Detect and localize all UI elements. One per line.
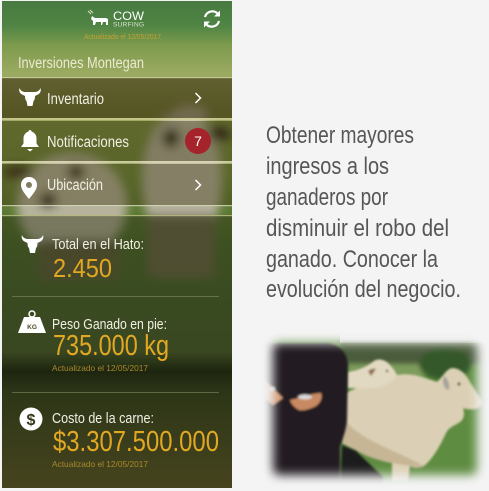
icon: weight KG: [18, 311, 46, 333]
menu item: Notificaciones: [21, 128, 211, 154]
logo: Cow Surfing: COW: [113, 9, 145, 23]
text block: objective statement: ganaderos por: [266, 184, 388, 211]
stat: costo de la carne: Actualizado el 12/05/2017: [52, 459, 148, 469]
icon: dollar coin: $: [27, 412, 36, 429]
blurred photo background of cattle: [2, 1, 232, 488]
divider: [12, 392, 219, 393]
menu item: Inventario: Inventario: [47, 91, 104, 108]
icon: bull head: [22, 235, 43, 253]
icon: bell: [21, 130, 39, 152]
icon: location pin: [21, 177, 37, 199]
menu item: Inventario: [19, 88, 200, 108]
stat: peso ganado en pie: 735.000 kg: [53, 330, 169, 362]
icon: weight KG: KG: [27, 324, 37, 331]
menu item: Ubicación: Ubicación: [47, 177, 103, 194]
menu item: Notificaciones: Notificaciones: [47, 134, 129, 151]
stat: peso ganado en pie: Peso Ganado en pie:: [52, 317, 167, 333]
heading: company name: Inversiones Montegan: [18, 55, 144, 72]
stat: costo de la carne: [20, 408, 219, 469]
menu row overlays: [2, 77, 232, 488]
update date: Actualizado el 12/05/2017: [84, 32, 161, 41]
menu item: Ubicación: [21, 177, 200, 199]
stat: total en el hato: Total en el Hato:: [52, 237, 144, 253]
cattle: [342, 360, 482, 481]
stat: total en el hato: 2.450: [53, 253, 112, 283]
stat: costo de la carne: Costo de la carne:: [52, 411, 154, 427]
pasture and trees: [268, 335, 485, 483]
text block: objective statement: ganado. Conocer la: [266, 246, 439, 273]
icon: bull head: [19, 88, 41, 106]
stat: costo de la carne: $3.307.500.000: [53, 426, 219, 458]
balaclava figure: [264, 343, 383, 491]
icon: dollar coin: [20, 408, 42, 430]
stat: peso ganado en pie: Actualizado el 12/05/2017: [52, 363, 148, 373]
logo: Cow Surfing: [88, 10, 144, 26]
text block: objective statement: ingresos a los: [266, 153, 389, 180]
divider: [12, 296, 219, 297]
text block: objective statement: [266, 122, 461, 303]
badge: notification count: [185, 128, 211, 154]
badge: notification count: 7: [194, 133, 202, 149]
stat: total en el hato: [22, 235, 143, 278]
text block: objective statement: Obtener mayores: [266, 122, 414, 149]
icon: refresh: [204, 10, 220, 28]
logo: Cow Surfing: SURFING: [113, 22, 144, 28]
photo: masked thief beside cattle: [264, 335, 485, 484]
panel: mobile app screen: [2, 1, 232, 488]
stat: peso ganado en pie: [18, 311, 169, 373]
text block: objective statement: disminuir el robo del: [266, 215, 449, 242]
